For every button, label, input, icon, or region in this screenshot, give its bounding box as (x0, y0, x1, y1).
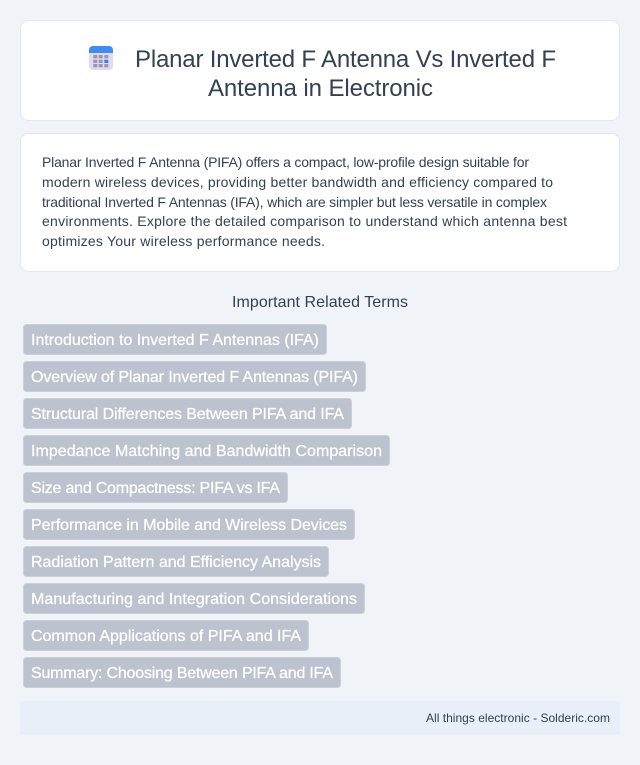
title: Antenna in Electronic (208, 75, 433, 102)
panel: title card (20, 20, 620, 120)
tag: performance (24, 510, 354, 540)
tag: overview: Overview of Planar Inverted F Antennas (PIFA) (31, 369, 358, 386)
tag: size and compactness: Size and Compactness: PIFA vs IFA (31, 480, 280, 497)
list: related terms (24, 324, 390, 688)
text block: intro: modern wireless devices, providing better bandwidth and efficiency compared to (42, 174, 553, 190)
tag: impedance matching (24, 436, 390, 466)
tag: radiation pattern (24, 546, 328, 576)
tag: structural differences: Structural Differences Between PIFA and IFA (31, 406, 344, 423)
title (135, 46, 556, 102)
tag: size and compactness (24, 472, 288, 502)
tag: overview (24, 362, 366, 392)
panel: intro paragraph (20, 134, 620, 272)
text block: intro: Planar Inverted F Antenna (PIFA) offers a compact, low-profile design suitable for (42, 154, 529, 170)
icon: calendar (89, 46, 113, 70)
tag: common applications: Common Applications of PIFA and IFA (31, 628, 301, 645)
title: Planar Inverted F Antenna Vs Inverted F (135, 46, 556, 73)
tag: summary (24, 658, 340, 688)
tag: structural differences (24, 398, 352, 428)
text block: intro (42, 154, 567, 249)
tag: introduction (24, 324, 326, 354)
tag: performance: Performance in Mobile and Wireless Devices (31, 517, 347, 534)
tag: introduction: Introduction to Inverted F Antennas (IFA) (31, 332, 319, 349)
tag: impedance matching: Impedance Matching and Bandwidth Comparison (31, 443, 382, 460)
tag: manufacturing: Manufacturing and Integration Considerations (31, 591, 357, 608)
text block: intro: optimizes Your wireless performance needs. (42, 233, 325, 249)
tag: manufacturing (24, 584, 364, 614)
tag: radiation pattern: Radiation Pattern and Efficiency Analysis (31, 554, 321, 571)
tag: common applications (24, 620, 308, 650)
footer (20, 701, 620, 735)
footer: All things electronic - Solderic.com (426, 711, 610, 725)
heading: important related terms: Important Related Terms (232, 294, 408, 311)
text block: intro: environments. Explore the detailed comparison to understand which antenna best (42, 213, 567, 229)
text block: intro: traditional Inverted F Antennas (IFA), which are simpler but less versatile in complex (42, 194, 547, 210)
tag: summary: Summary: Choosing Between PIFA and IFA (31, 665, 333, 682)
